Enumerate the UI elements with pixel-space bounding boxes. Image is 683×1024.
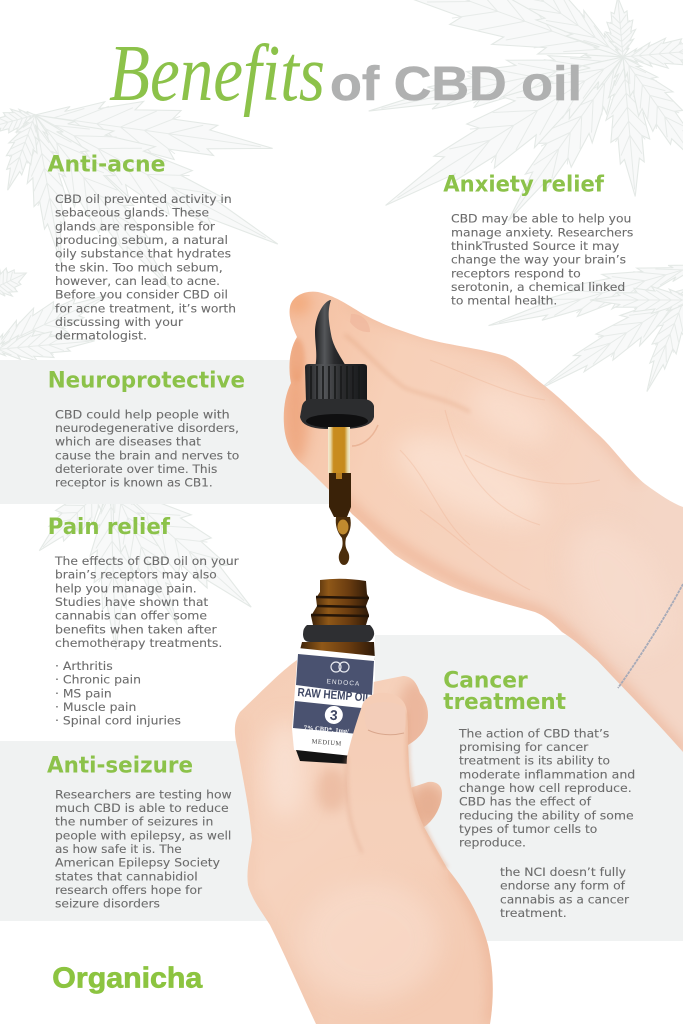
- text block: to mental health.: [451, 294, 557, 308]
- bracelet: [618, 584, 683, 688]
- bullet list: · Arthritis: [55, 659, 113, 673]
- text block: reproduce.: [459, 836, 526, 850]
- text block: CBD could help people with: [55, 407, 230, 421]
- text block: [451, 212, 633, 308]
- hemp leaf: top right: [339, 0, 683, 235]
- text block: help you manage pain.: [55, 581, 197, 595]
- text block: receptors respond to: [451, 266, 581, 280]
- text block: treatment is its ability to: [459, 754, 610, 768]
- text block: much CBD is able to reduce: [55, 801, 229, 815]
- text block: receptor is known as CB1.: [55, 476, 213, 490]
- glass tube with oil: [328, 427, 350, 473]
- text block: for acne treatment, it’s worth: [55, 301, 236, 315]
- text block: glands are responsible for: [55, 219, 215, 233]
- heading: Anti-acne: [48, 152, 166, 178]
- heading: Anti-seizure: [47, 752, 193, 778]
- text block: reducing the ability of some: [459, 808, 634, 822]
- label text: RAW HEMP OIL: [297, 685, 372, 705]
- text block: American Epilepsy Society: [55, 856, 220, 870]
- text block: however, can lead to acne.: [55, 274, 220, 288]
- text block: [55, 192, 236, 343]
- cap collar: [300, 399, 374, 429]
- text block: Before you consider CBD oil: [55, 288, 228, 302]
- text block: brain’s receptors may also: [55, 568, 217, 582]
- heading: treatment: [443, 689, 566, 715]
- text block: [458, 726, 635, 850]
- text block: [55, 787, 232, 911]
- dropper: [300, 300, 374, 565]
- text block: discussing with your: [55, 315, 183, 329]
- glass neck: [311, 579, 369, 625]
- panel: anxiety relief: [443, 172, 633, 308]
- heading: Anxiety relief: [443, 172, 604, 198]
- text block: deteriorate over time. This: [55, 462, 217, 476]
- upper hand holding dropper: [283, 291, 683, 752]
- label text: 7% CBD*, 1mg/: [303, 725, 349, 735]
- text block: NCI note: cannabis as a cancer: [500, 892, 629, 906]
- label text: 3: [329, 707, 339, 723]
- text block: research offers hope for: [55, 883, 202, 897]
- title script word: Benefits: [109, 30, 325, 118]
- text block: oily substance that hydrates: [55, 247, 231, 261]
- heading: Cancer: [443, 668, 529, 694]
- lower hand back: [235, 660, 493, 1024]
- logo mark: [331, 662, 349, 672]
- text block: [54, 554, 239, 650]
- ribbed cap: [305, 364, 367, 402]
- bullet list: · Muscle pain: [55, 700, 136, 714]
- hemp leaf: behind pain relief: [26, 459, 270, 651]
- text block: which are diseases that: [55, 435, 201, 449]
- heading: Neuroprotective: [48, 367, 245, 393]
- panel: cancer treatment: [443, 668, 635, 920]
- title: [109, 30, 582, 118]
- thumb shading: [407, 712, 447, 868]
- text block: neurodegenerative disorders,: [55, 421, 239, 435]
- title bold words: of CBD oil: [330, 58, 582, 111]
- panel: neuroprotective band: [0, 360, 345, 504]
- text block: producing sebum, a natural: [55, 233, 228, 247]
- heading: [443, 668, 566, 715]
- text block: cause the brain and nerves to: [55, 448, 239, 462]
- text block: The action of CBD that’s: [458, 726, 609, 740]
- hemp leaf: right middle: [484, 248, 683, 404]
- text block: sebaceous glands. These: [55, 206, 209, 220]
- label text: ENDOCA: [326, 678, 360, 688]
- thumbnail: [365, 702, 406, 735]
- text block: dermatologist.: [55, 329, 147, 343]
- panel: anti-acne: [48, 152, 236, 343]
- text block: the skin. Too much sebum,: [55, 260, 223, 274]
- panel: anti-seizure: [47, 752, 232, 911]
- text block: types of tumor cells to: [459, 822, 597, 836]
- text block: change the way your brain’s: [451, 253, 626, 267]
- bottle base: [296, 750, 352, 764]
- text block: serotonin, a chemical linked: [451, 280, 625, 294]
- text block: NCI note: [500, 865, 629, 920]
- bullet list: · Spinal cord injuries: [55, 714, 181, 728]
- text block: thinkTrusted Source it may: [451, 239, 619, 253]
- text block: chemotherapy treatments.: [55, 636, 222, 650]
- hemp leaf: upper left: [0, 87, 291, 304]
- text block: manage anxiety. Researchers: [451, 225, 633, 239]
- label: [292, 648, 375, 756]
- bullet list: · Chronic pain: [55, 673, 141, 687]
- ring: [303, 625, 374, 642]
- logo: Organicha: Organicha: [52, 962, 203, 994]
- text block: people with epilepsy, as well: [55, 828, 231, 842]
- text block: cannabis can offer some: [55, 609, 207, 623]
- text block: CBD oil prevented activity in: [55, 192, 232, 206]
- text block: The effects of CBD oil on your: [54, 554, 239, 568]
- text block: NCI note: treatment.: [500, 906, 567, 920]
- text block: states that cannabidiol: [55, 869, 198, 883]
- panel: neuroprotective: [48, 367, 245, 490]
- text block: Studies have shown that: [55, 595, 209, 609]
- heading: Pain relief: [48, 514, 170, 540]
- bottle: [292, 579, 375, 764]
- rubber bulb: [315, 300, 347, 368]
- text block: the number of seizures in: [55, 815, 213, 829]
- panel: pain relief: [48, 514, 239, 728]
- text block: benefits when taken after: [55, 622, 217, 636]
- glass shoulder: [299, 642, 375, 660]
- thumbnail: [350, 314, 370, 332]
- oil drop: [336, 517, 351, 565]
- text block: moderate inflammation and: [459, 767, 635, 781]
- text block: NCI note: endorse any form of: [500, 879, 626, 893]
- panel: cancer treatment band: [375, 635, 683, 941]
- text block: seizure disorders: [55, 897, 160, 911]
- text block: [55, 407, 239, 490]
- bullet list: · MS pain: [55, 686, 112, 700]
- label text: MEDIUM: [311, 738, 342, 748]
- text block: NCI note: the NCI doesn’t fully: [500, 865, 626, 879]
- text block: change how cell reproduce.: [459, 781, 632, 795]
- hemp leaf: left: [0, 260, 116, 368]
- lower hand front with thumb: [340, 693, 450, 890]
- text block: CBD has the effect of: [459, 795, 592, 809]
- text block: promising for cancer: [459, 740, 588, 754]
- text block: as how safe it is. The: [55, 842, 182, 856]
- bullet list: [55, 659, 181, 728]
- label text: [293, 676, 373, 750]
- text block: CBD may be able to help you: [451, 212, 631, 226]
- text block: Researchers are testing how: [55, 787, 232, 801]
- panel: anti-seizure band: [0, 741, 270, 921]
